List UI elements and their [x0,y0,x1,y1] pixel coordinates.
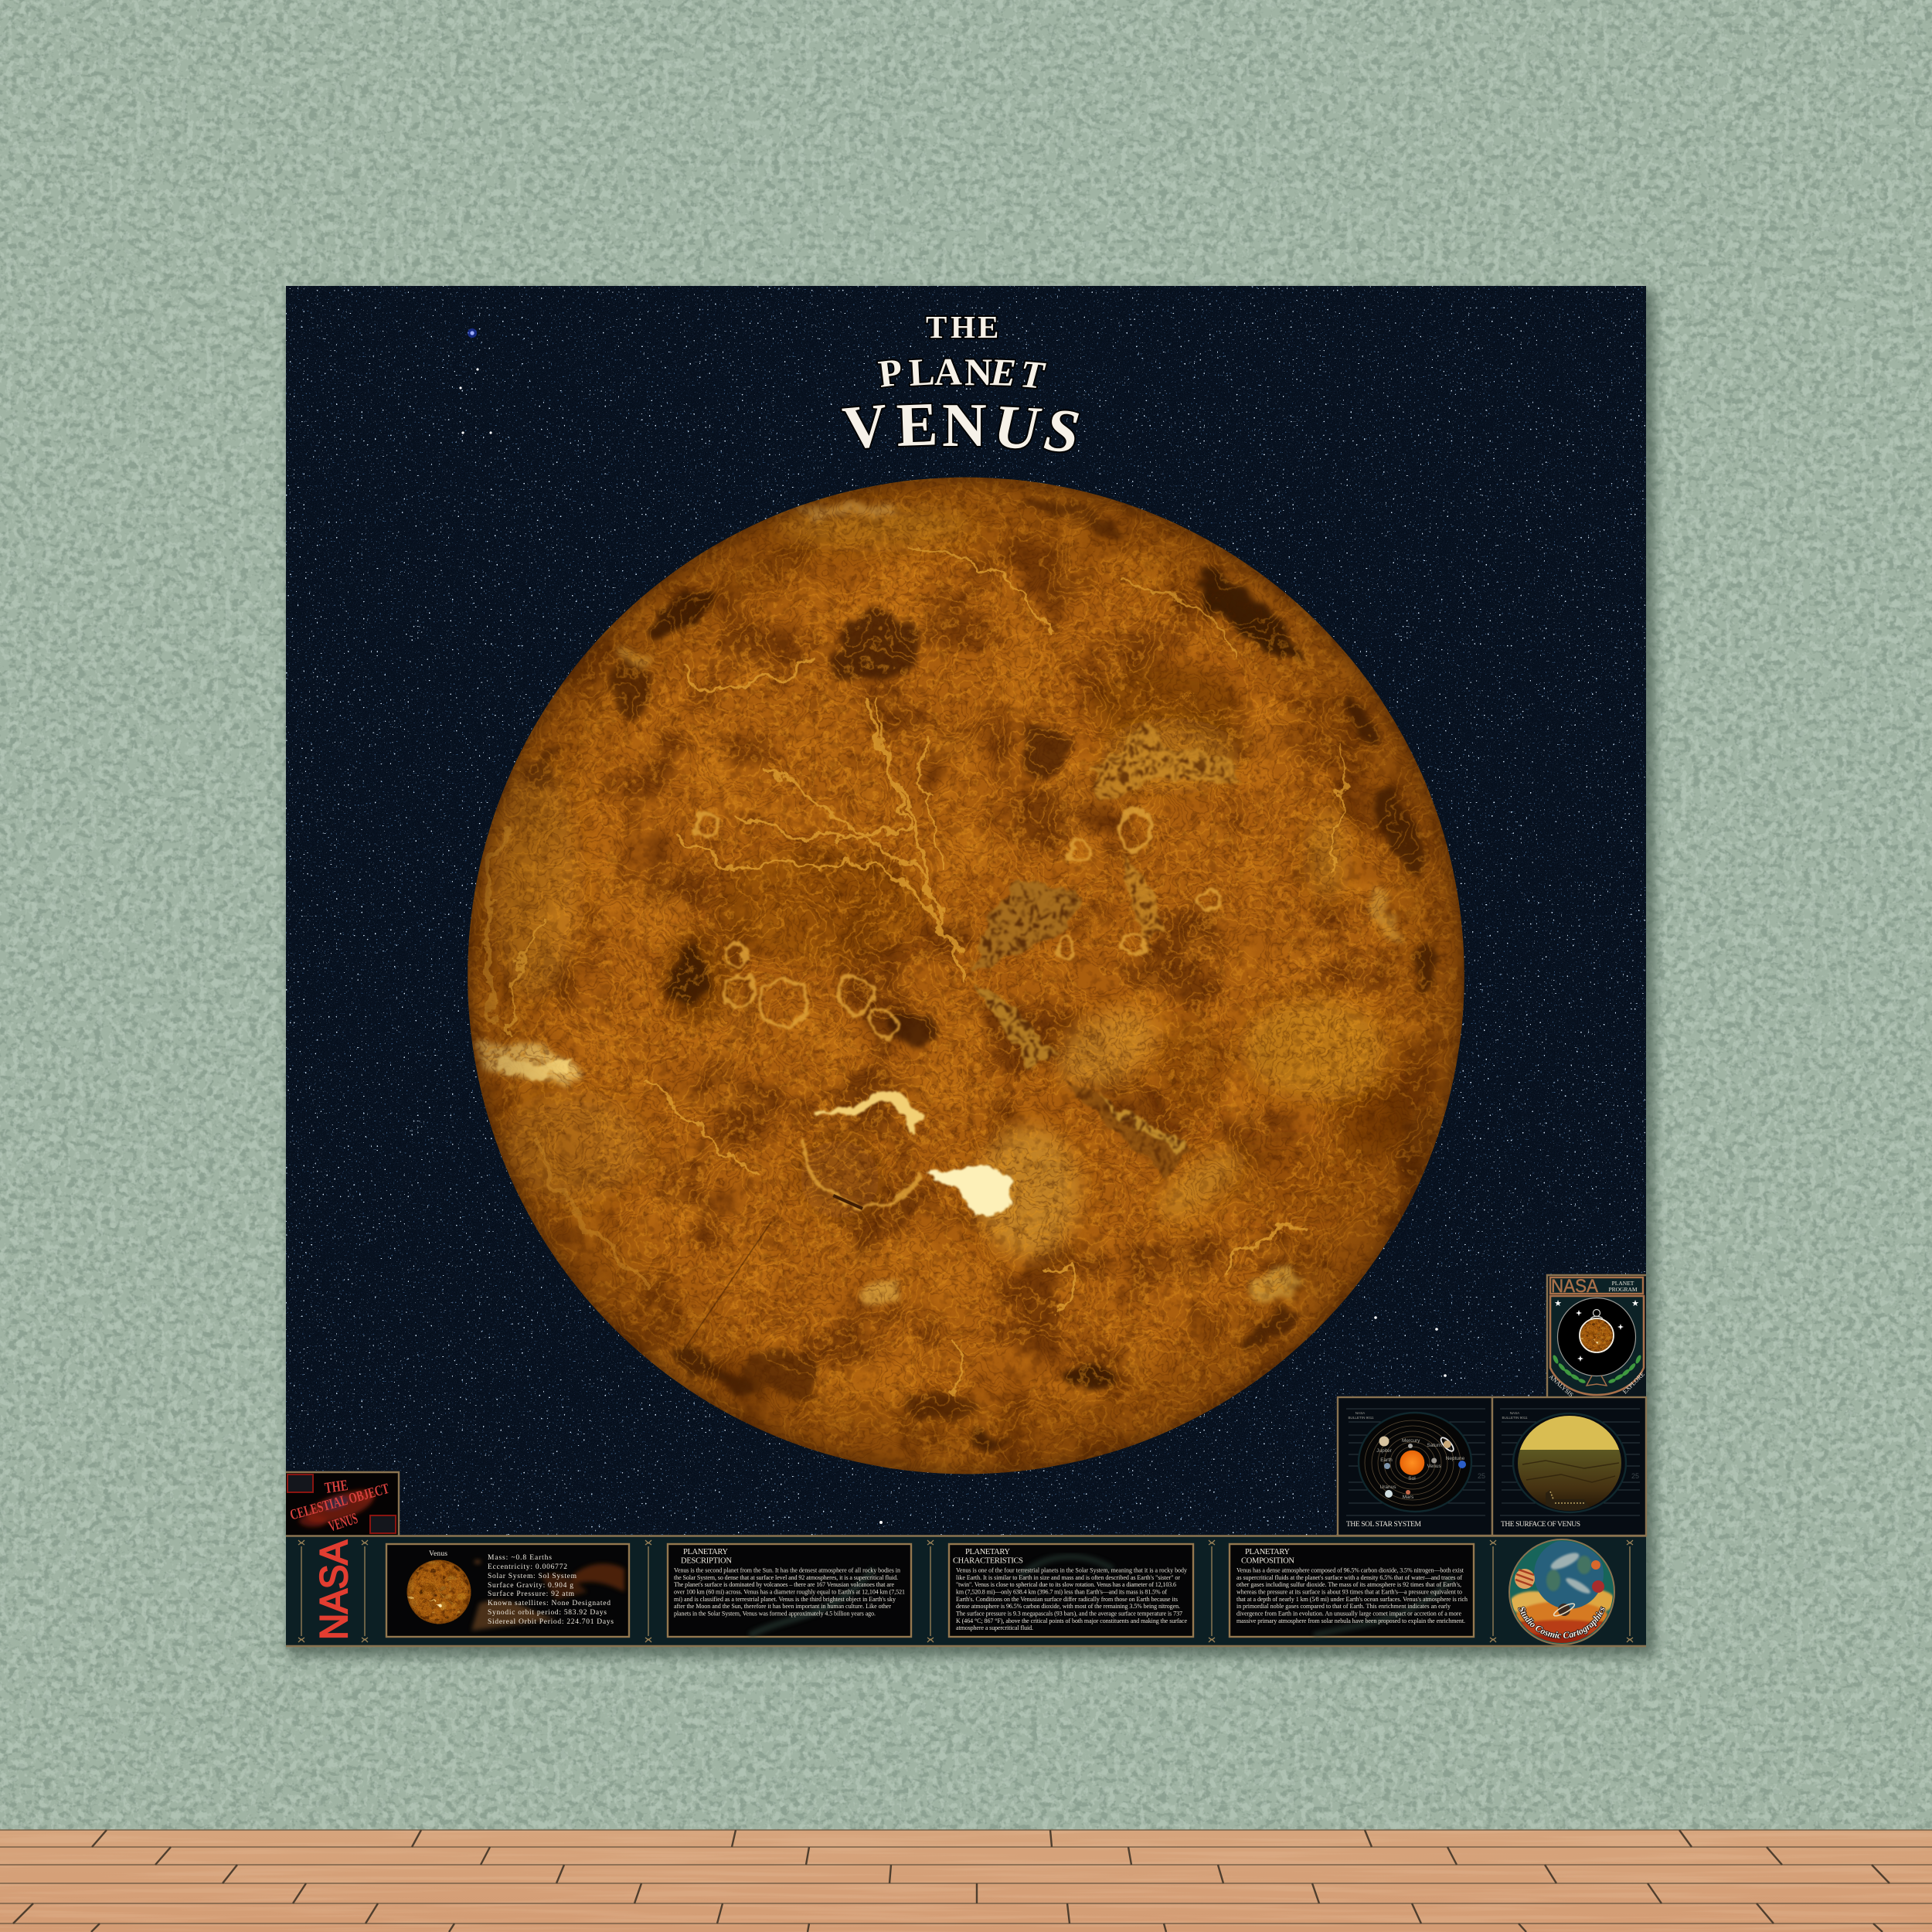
swirl backdrop [1314,1577,1453,1635]
planet labels: Earth [1380,1458,1393,1463]
patch stars: ★ [1554,1298,1562,1308]
fact list: Surface Gravity: 0.904 g [488,1581,573,1590]
panel: the Sol star system: 25 [1478,1472,1485,1480]
planet labels: Uranus [1380,1485,1396,1490]
body text: km (7,520.8 mi)—only 638.4 km (396.7 mi) less than Earth's—and its mass is 81.5% of [956,1589,1167,1595]
orbit diagram [1359,1413,1471,1512]
heading: PLANETARY [683,1548,728,1556]
panel: planetary characteristics [949,1544,1193,1637]
patch NASA wordmark: NASA [1551,1276,1598,1297]
earth [1534,1539,1604,1609]
fact list: Mass: ~0.8 Earths [488,1554,552,1562]
heading: PLANETARY [965,1548,1010,1556]
plaque text: VENUS [327,1510,360,1536]
body text: massive primary atmosphere from solar nebula have been proposed to explain the enrichment. [1236,1617,1465,1624]
heading [681,1548,732,1566]
body text: in primordial noble gases compared to that of Earth. This enrichment indicates an early [1236,1603,1451,1610]
tiny bulletin label: NASA [1355,1411,1366,1415]
planet labels: Sol [1408,1476,1416,1481]
shield [1550,1296,1644,1395]
heading: PLANETARY [1245,1548,1290,1556]
title line: PLANET: PLAN [876,349,992,396]
main planet Venus [456,464,1476,1488]
body text: Venus is one of the four terrestrial planets in the Solar System, meaning that it is a rocky body [956,1567,1187,1573]
caption: THE SOL STAR SYSTEM [1346,1521,1422,1529]
body text: the Solar System, so dense that at surface level and 92 atmospheres, it is a supercritical fluid. [674,1574,898,1581]
title line: VENUS: US [992,393,1083,467]
tiny bulletin label [1502,1411,1528,1420]
body text [674,1567,905,1617]
body text: atmosphere a supercritical fluid. [956,1624,1033,1631]
patch planet [1580,1318,1614,1353]
mission patch: NASA Planet Program [1546,1274,1646,1398]
heading [1241,1548,1294,1566]
body text: after the Moon and the Sun, therefore it has been important in human culture. Like other [674,1603,891,1610]
heading: COMPOSITION [1241,1556,1294,1566]
body text [1236,1567,1468,1624]
heading [953,1548,1023,1566]
badge: studio seal [1509,1539,1615,1645]
tiny bulletin label: NASA [1510,1411,1520,1415]
body text [956,1567,1187,1631]
panel: Venus facts: Venus [429,1550,447,1558]
body text: dense atmosphere is 96.5% carbon dioxide, with most of the remaining 3.5% being nitrogen. [956,1603,1180,1610]
panel: the surface of Venus [1492,1397,1646,1536]
sun [1400,1451,1424,1475]
wooden floor [0,1830,1932,1932]
body text: whereas the pressure at its surface is about 93 times that at Earth's—a pressure equivalent to [1236,1589,1462,1595]
plaque text [288,1477,391,1536]
starfield background [286,286,1646,1647]
panel: Venus facts [386,1544,629,1637]
seal lettering: Studio Cosmic Cartographics [1518,1606,1606,1639]
tiny bulletin label: BULLETIN 9011 [1502,1416,1528,1420]
body text: planets in the Solar System, Venus was formed approximately 4.5 billion years ago. [674,1611,876,1617]
body text: over 100 km (60 mi) across. Venus has a diameter roughly equal to Earth's at 12,104 km (7,521 [674,1589,905,1595]
striped planet [1515,1569,1535,1589]
title line: VENUS: VEN [840,390,987,463]
NASA worm logo: NASA [312,1539,355,1640]
fact list: Known satellites: None Designated [488,1600,611,1607]
title line: PLANET: ET [989,350,1048,397]
planet labels [1376,1438,1465,1500]
panel: celestial object plaque [286,1472,399,1536]
planet labels: Jupiter [1376,1448,1393,1454]
patch motto: EXPLORE [1621,1371,1646,1395]
poster [286,286,1648,1648]
bottom information band [286,1535,1646,1648]
fact list: Solar System: Sol System [488,1573,577,1580]
body text: as supercritical fluids at the planet's surface with a density 6.5% that of water—and traces of [1236,1574,1462,1581]
small planets [1592,1580,1604,1593]
body text: Venus has a dense atmosphere composed of 96.5% carbon dioxide, 3.5% nitrogen—both exist [1236,1567,1464,1573]
planets [1379,1436,1389,1447]
swirl backdrop [750,1569,873,1635]
body text: other gases including sulfur dioxide. The mass of its atmosphere is 92 times that of Earth's, [1236,1581,1461,1588]
body text: "twin". Venus is close to spherical due to its slow rotation. Venus has a diameter of 12,103.6 [956,1581,1176,1588]
planet labels: Neptune [1446,1456,1465,1461]
astronaut icon [1590,1309,1603,1319]
body text: mi) and is classified as a terrestrial planet. Venus is the third brightest object in Earth's sky [674,1596,896,1603]
body text: K (464 °C; 867 °F), above the critical points of both major constituents and making the surface [956,1617,1187,1624]
patch program text: PLANET [1612,1280,1634,1287]
lander [1546,1490,1592,1511]
body text: like Earth. It is similar to Earth in size and mass and is often described as Earth's "sister" or [956,1574,1180,1581]
laurel wreath [1552,1354,1642,1384]
ringed planet [1553,1601,1576,1618]
patch program text [1608,1280,1638,1293]
heading: CHARACTERISTICS [953,1556,1023,1566]
planet labels: Mars [1403,1495,1414,1500]
planet labels: Mercury [1402,1438,1420,1444]
body text: that at a depth of nearly 1 km (5⁄8 mi) under Earth's ocean surfaces. Venus's atmosphere is rich [1236,1596,1468,1603]
title line: THE: THE [926,309,998,345]
body text: Earth's. Conditions on the Venusian surface differ radically from those on Earth because its [956,1596,1178,1603]
patch stars [1554,1298,1639,1362]
planet labels: Saturn [1427,1443,1442,1448]
poster drop shadow [289,291,1655,1657]
panel: planetary description [668,1544,911,1637]
plaque text: THE [324,1477,349,1497]
panel: the Sol star system [1338,1397,1492,1536]
clouds [1507,1589,1617,1646]
patch motto: ANALYSIS [1548,1373,1574,1398]
tiny bulletin label: BULLETIN 9011 [1348,1416,1374,1420]
body text: The planet's surface is dominated by volcanoes – there are 167 Venusian volcanoes that are [674,1581,894,1588]
heading: DESCRIPTION [681,1556,732,1566]
swirl backdrop [1020,1556,1113,1577]
fact list: Eccentricity: 0.006772 [488,1563,567,1571]
body text: divergence from Earth in evolution. An unusually large comet impact or accretion of a more [1236,1611,1461,1617]
fact list: Sidereal Orbit Period: 224.701 Days [488,1618,614,1626]
tiny bulletin label [1348,1411,1374,1420]
title [840,309,1083,467]
caption: THE SURFACE OF VENUS [1501,1521,1580,1529]
fact list: Surface Pressure: 92 atm [488,1590,575,1598]
porthole view [1513,1413,1626,1513]
fact list [488,1554,614,1626]
body text: The surface pressure is 9.3 megapascals (93 bars), and the average surface temperature is 737 [956,1611,1182,1617]
nebula [299,1485,377,1529]
body text: Venus is the second planet from the Sun. It has the densest atmosphere of all rocky bodies in [674,1567,900,1573]
panel: planetary composition [1230,1544,1474,1637]
fact list: Synodic orbit period: 583.92 Days [488,1609,607,1617]
plaque text: CELESTIAL OBJECT [288,1481,391,1523]
mini planet [406,1559,471,1625]
patch program text: PROGRAM [1608,1286,1638,1293]
planet labels: Venus [1427,1464,1441,1469]
patch motto [1548,1371,1646,1398]
swirl backdrop [471,1560,624,1631]
patch stars: ★ [1631,1298,1639,1308]
panel: the surface of Venus: 25 [1631,1472,1639,1480]
red inset boxes [287,1475,396,1533]
